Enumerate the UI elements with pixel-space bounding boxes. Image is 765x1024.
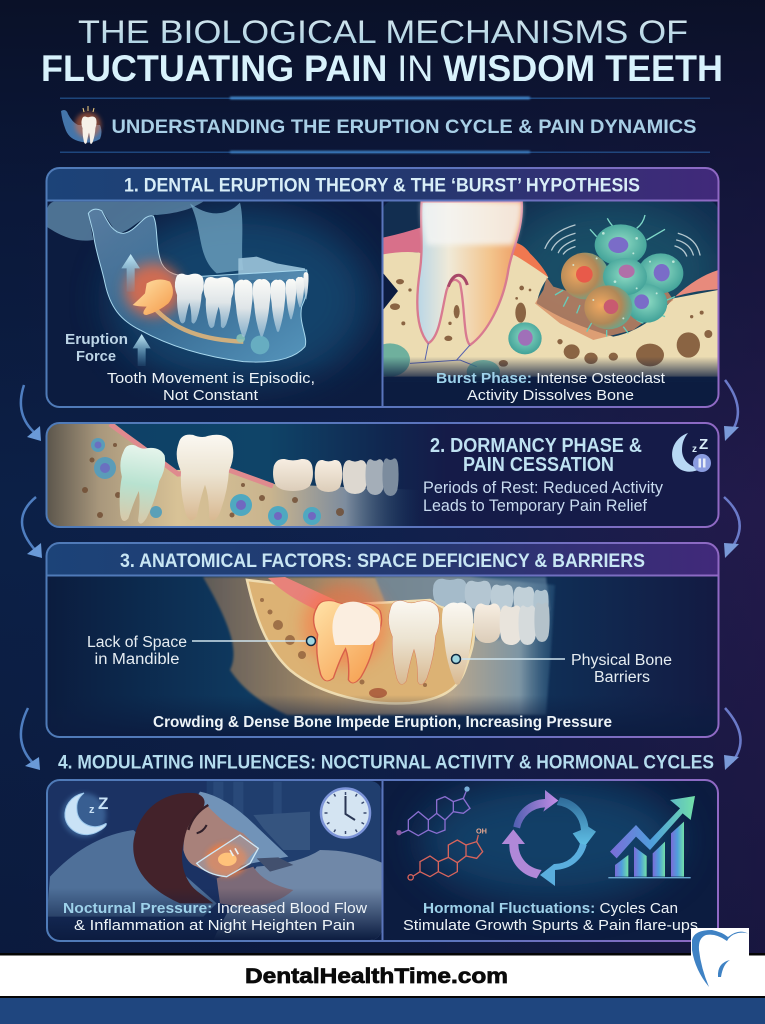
caption: hormonal fluctuations: Hormonal Fluctuations: Cycles Can — [423, 900, 678, 917]
heading: dormancy phase — [430, 435, 642, 476]
footer band — [0, 953, 765, 1024]
divider chevron — [383, 273, 398, 310]
logo: tooth mark — [691, 928, 749, 987]
callout: lack of space — [87, 634, 316, 668]
arrow: eruption force — [133, 334, 151, 366]
section 1 header: 1. DENTAL ERUPTION THEORY & THE ‘BURST’ HYPOTHESIS — [124, 176, 640, 196]
heading: section 4: 4. MODULATING INFLUENCES: NOCTURNAL ACTIVITY & HORMONAL CYCLES — [58, 752, 714, 774]
callout: bone barriers: Physical Bone — [571, 652, 672, 669]
icon: crescent moon with zz — [62, 793, 108, 837]
title: THE BIOLOGICAL MECHANISMS OF — [78, 14, 688, 50]
callout: lack of space: in Mandible — [94, 651, 180, 668]
text: periods of rest: Leads to Temporary Pain Relief — [423, 497, 647, 515]
icon: sleeping moon with pause — [672, 433, 711, 472]
arrow: section 2 to 3 right — [724, 497, 740, 558]
molecule: estrogen outline — [396, 786, 470, 836]
arrow: section 3 to 4 right — [724, 708, 741, 770]
caption: hormonal fluctuations: Stimulate Growth Spurts & Pain flare-ups — [403, 917, 698, 934]
icon: crescent moon with zz: z — [89, 804, 95, 816]
section 1 right caption: Activity Dissolves Bone — [467, 387, 634, 404]
panel: section 4 modulating influences — [47, 780, 718, 941]
growth chart — [608, 796, 695, 878]
image: crowded jaw cross-section — [102, 576, 665, 726]
caption: nocturnal pressure: Nocturnal Pressure: Increased Blood Flow — [63, 900, 367, 917]
image: resting teeth in bone — [47, 424, 447, 527]
title: FLUCTUATING PAIN IN WISDOM TEETH — [41, 48, 723, 89]
footer site name: DentalHealthTime.com — [245, 965, 508, 988]
arrow: section 2 to 3 left — [22, 497, 42, 558]
section 1 left caption — [65, 331, 315, 404]
image: translucent jaw with erupting tooth — [47, 201, 382, 406]
cycle arrows — [502, 790, 596, 886]
title — [41, 14, 723, 89]
panel: section 1 dental eruption — [46, 168, 723, 412]
caption: hormonal fluctuations — [403, 900, 698, 934]
arrow: section 1 to 2 left — [21, 385, 41, 441]
icon: sleeping moon with pause: Z — [699, 436, 708, 453]
callout: lack of space: Lack of Space — [87, 634, 187, 651]
text: periods of rest — [423, 479, 664, 515]
section 1 right caption — [436, 370, 666, 404]
heading: dormancy phase: PAIN CESSATION — [463, 454, 614, 476]
heading: dormancy phase: 2. DORMANCY PHASE & — [430, 435, 642, 457]
section 1 right caption: Burst Phase: Intense Osteoclast — [436, 370, 666, 387]
image: woman sleeping with glowing jaw — [47, 780, 383, 940]
text: periods of rest: Periods of Rest: Reduced Activity — [423, 479, 664, 497]
section 3 header — [47, 544, 718, 575]
icon: sleeping moon with pause: z — [692, 444, 697, 455]
molecule: testosterone outline — [408, 835, 483, 880]
image: hormone molecules, cycle and growth chart: OH — [476, 826, 487, 835]
section 1 left caption: Tooth Movement is Episodic, — [107, 370, 315, 387]
arrow: section 3 to 4 left — [21, 708, 40, 770]
panel: section 2 dormancy — [46, 423, 718, 527]
subtitle: UNDERSTANDING THE ERUPTION CYCLE & PAIN DYNAMICS — [112, 116, 696, 138]
callout: bone barriers: Barriers — [594, 669, 650, 686]
callout: bone barriers — [452, 652, 672, 686]
icon: wall clock — [321, 788, 370, 838]
panel 1 outline — [46, 168, 718, 407]
section 3 header: 3. ANATOMICAL FACTORS: SPACE DEFICIENCY & BARRIERS — [120, 551, 645, 572]
icon: jaw with aching tooth — [61, 106, 102, 144]
image: osteoclast burst phase — [384, 202, 718, 382]
section 1 left caption: Eruption — [65, 331, 128, 348]
caption: nocturnal pressure — [63, 900, 367, 934]
arrow: section 1 to 2 right — [724, 380, 739, 441]
image: hormone molecules, cycle and growth chart — [396, 781, 695, 914]
caption: nocturnal pressure: & Inflammation at Night Heighten Pain — [74, 917, 355, 934]
caption: crowding: Crowding & Dense Bone Impede Eruption, Increasing Pressure — [153, 714, 612, 731]
panel: section 3 anatomical factors — [46, 543, 718, 737]
arrow: upward eruption — [121, 254, 140, 292]
divider glow lines — [60, 96, 710, 154]
section 1 header — [47, 168, 718, 200]
icon: crescent moon with zz: Z — [98, 794, 108, 813]
section 1 left caption: Not Constant — [163, 387, 259, 404]
section 1 left caption: Force — [76, 348, 116, 365]
